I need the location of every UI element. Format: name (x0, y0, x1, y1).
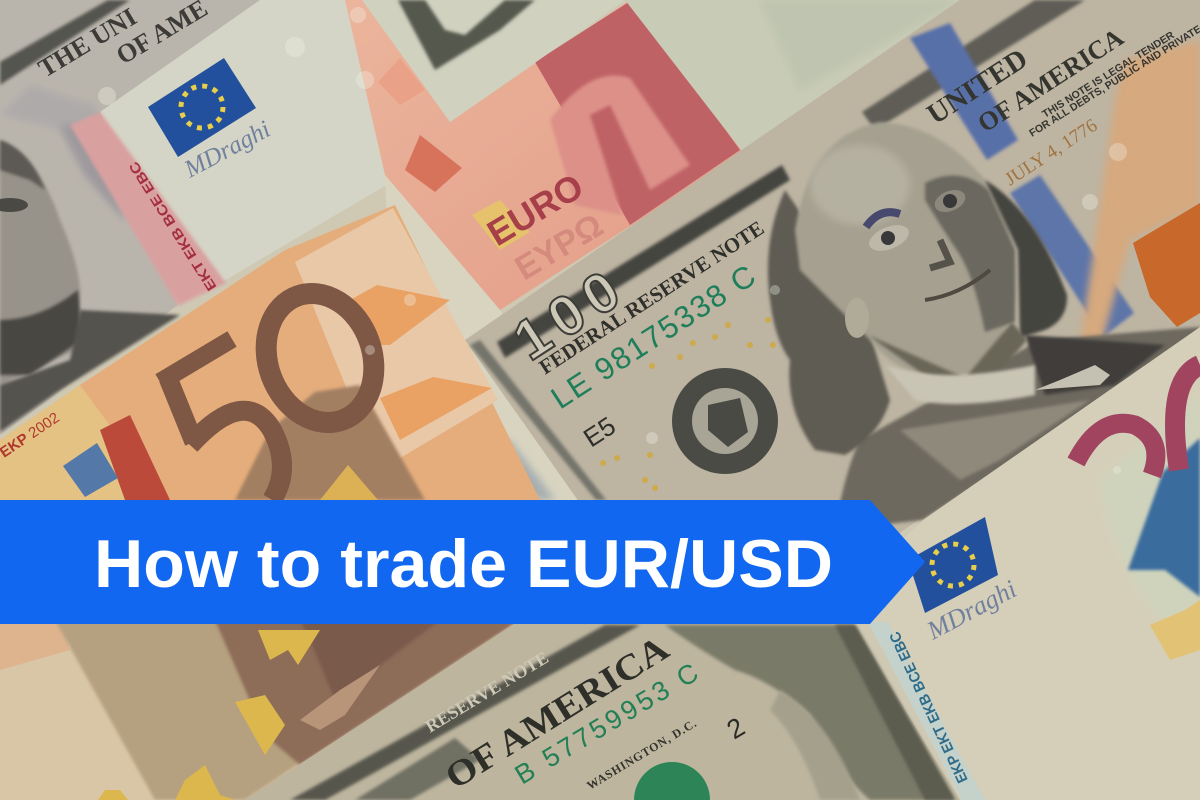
seal: green treasury (634, 762, 710, 800)
panel: pale note behind fifty (385, 175, 620, 520)
panel: hundred dollar note: FOR ALL DEBTS, PUBLIC AND PRIVATE (1027, 23, 1200, 140)
panel: hundred dollar note (465, 0, 1200, 560)
engraved band (497, 165, 790, 358)
engraved band (290, 625, 640, 800)
panel: five dollar note: THE UNI (33, 2, 142, 83)
gold dots (600, 317, 776, 491)
panel: green euro note top right (625, 0, 985, 155)
portrait: Benjamin Franklin (768, 122, 1200, 530)
panel: hundred dollar note: E5 (578, 411, 621, 453)
numeral: 50 (160, 278, 391, 500)
panel: hundred dollar note: THIS NOTE IS LEGAL TENDER (1040, 29, 1177, 121)
panel: red twenty euro note: EYPΩ (509, 206, 610, 288)
icon: EU flag (908, 517, 998, 613)
panel: fifty euro note lower section (0, 620, 520, 800)
panel: one dollar note (245, 620, 960, 800)
panel: hundred dollar note: FEDERAL RESERVE NOTE (535, 216, 768, 379)
panel: hundred dollar note: JULY 4, 1776 (1001, 115, 1101, 190)
panel: pale euro note with flag: MDraghi (179, 116, 275, 184)
panel: twenty euro note bottom right: MDraghi (921, 574, 1021, 646)
blue security ribbon (910, 23, 1134, 337)
panel: twenty dollar corner (362, 0, 625, 122)
portrait: Lincoln (0, 140, 180, 432)
security strip (70, 112, 226, 306)
seal: federal reserve (672, 368, 778, 474)
panel: one dollar note: 2 (722, 712, 750, 745)
leaf ornament (665, 625, 955, 800)
panel: five dollar note (0, 0, 260, 435)
panel: one dollar note: B 57759953 C (510, 657, 703, 790)
panel: pale euro note with flag (70, 0, 395, 306)
banner arrow (0, 500, 925, 624)
panel: twenty euro note bottom right: EKP EKT EKB BCE EBC (886, 629, 972, 785)
panel: hundred dollar note: OF AMERICA (972, 22, 1129, 138)
icon: EU flag (148, 58, 256, 157)
banner title: How to trade EUR/USD (94, 526, 833, 602)
panel: one dollar note: OF AMERICA (438, 628, 675, 797)
panel: twenty euro note bottom right (860, 327, 1200, 800)
panel: red twenty euro note (345, 0, 745, 310)
security strip (868, 622, 985, 800)
panel: fifty euro note (0, 205, 540, 500)
panel: pale euro note with flag: EKT EKB BCE EBC (125, 159, 220, 294)
numeral: 100: 100 (502, 258, 630, 372)
bokeh specks (98, 7, 1127, 474)
quill and orange block (1080, 40, 1200, 350)
panel: one dollar note: RESERVE NOTE (422, 647, 552, 736)
panel: hundred dollar note: UNITED (921, 43, 1033, 131)
numeral: 20 (1076, 365, 1200, 597)
panel: red twenty euro note: EURO (480, 165, 590, 254)
panel: one dollar note: WASHINGTON, D.C. (584, 716, 699, 793)
icon: gold stars (98, 630, 320, 800)
panel: hundred dollar note: LE 98175338 C (545, 258, 762, 416)
states lettering block (355, 738, 480, 800)
